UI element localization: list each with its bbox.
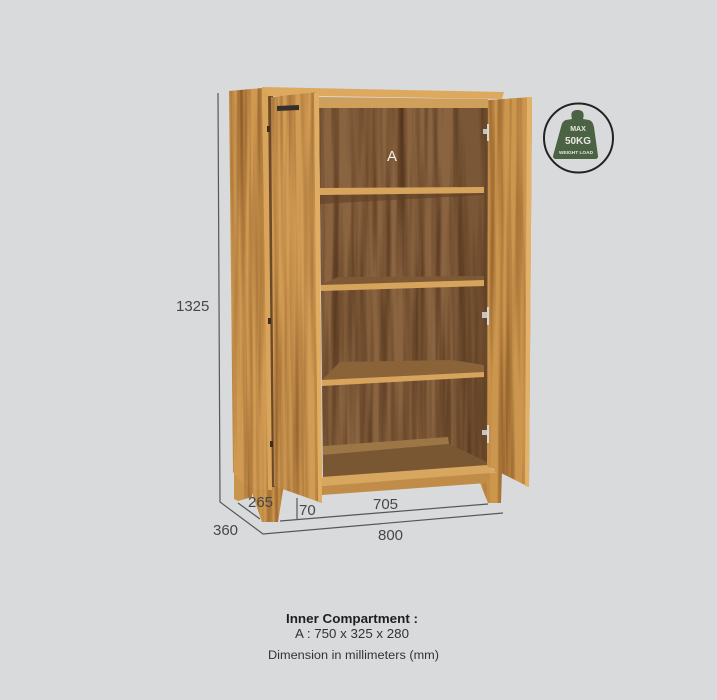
- units note: Dimension in millimeters (mm): [268, 650, 439, 662]
- left side panel: [229, 88, 270, 490]
- weight load badge: WEIGHT LOAD: [559, 150, 594, 156]
- left door handle: [277, 105, 299, 111]
- inner compartment caption: [268, 611, 439, 662]
- weight load badge: [544, 104, 613, 172]
- right door: [487, 97, 532, 487]
- front left leg: [245, 482, 284, 522]
- plinth: [322, 473, 490, 495]
- back left leg: [234, 470, 252, 501]
- depth inner: 265: [248, 494, 273, 511]
- interior right side wall: [453, 107, 488, 466]
- depth outer: 360: [213, 522, 238, 539]
- dimension labels: [176, 298, 403, 544]
- right leg: [478, 470, 502, 503]
- left side panel light edge: [262, 88, 272, 490]
- weight icon: [553, 110, 598, 159]
- bottom front rail: [322, 465, 497, 486]
- weight load badge: 50KG: [565, 136, 591, 147]
- left door: [271, 92, 322, 503]
- cabinet floor: [323, 444, 487, 477]
- total width: 800: [378, 527, 403, 544]
- cabinet: [229, 87, 532, 522]
- shelf 3: [322, 360, 484, 386]
- shelf 2: [321, 276, 484, 291]
- left door hinges: [267, 126, 273, 447]
- dimension lines: [218, 93, 503, 534]
- left door edge: [314, 92, 322, 503]
- dark gap behind left door: [266, 96, 275, 487]
- plinth: 70: [299, 502, 316, 519]
- header rail: [319, 97, 488, 108]
- caption heading: Inner Compartment :: [286, 611, 418, 626]
- weight load badge: MAX: [570, 126, 586, 133]
- hinges: [482, 124, 489, 443]
- interior back wall: [319, 107, 488, 480]
- inner width: 705: [373, 496, 398, 513]
- right door edge: [525, 97, 532, 487]
- lower back rail: [323, 437, 449, 455]
- top board: [262, 87, 504, 99]
- shelf 1: [320, 187, 484, 204]
- compartment label A: A: [387, 148, 397, 165]
- height: 1325: [176, 298, 209, 315]
- caption dimensions: A : 750 x 325 x 280: [295, 626, 409, 641]
